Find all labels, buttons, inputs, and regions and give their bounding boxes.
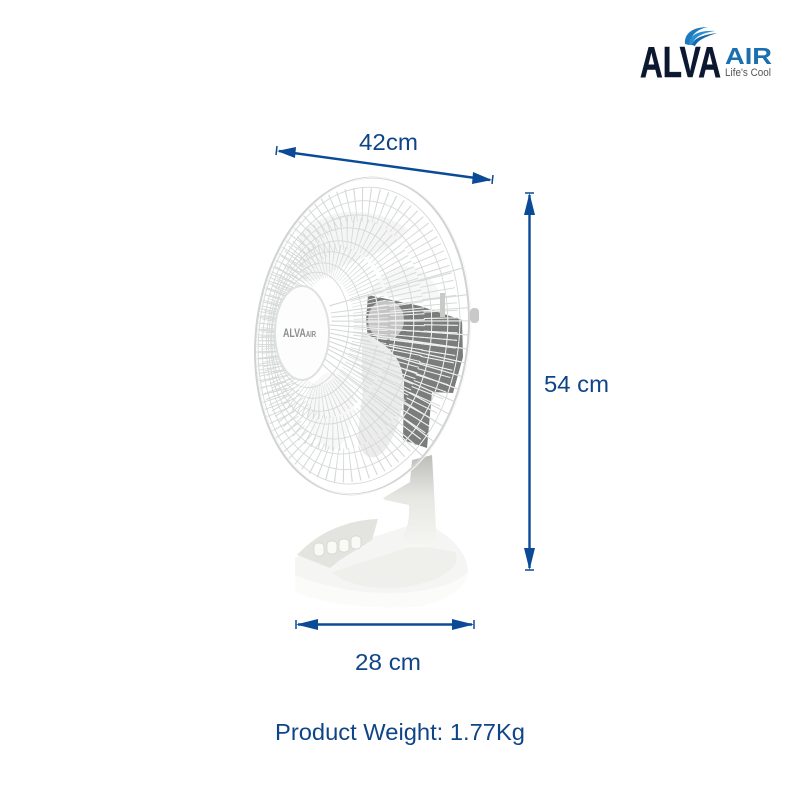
control knobs: [314, 536, 361, 556]
logo wordmark AIR: AIR: [725, 43, 772, 69]
logo wordmark ALVA: ALVA: [640, 38, 721, 87]
fan rim: [237, 165, 487, 507]
fan motor hub highlight: [368, 300, 404, 340]
fan motor housing: [366, 295, 463, 448]
fan neck: [383, 455, 436, 548]
fan badge logo: ALVAAIR: [283, 326, 316, 340]
icon: logo wave: [685, 27, 717, 46]
label: 28 cm: 28 cm: [355, 649, 421, 675]
label: 42cm: 42cm: [359, 129, 418, 155]
dimension: height 54 cm: [524, 193, 609, 570]
fan product image: [254, 176, 479, 593]
logo: Alva Air: [640, 27, 772, 87]
fan grille over motor: [366, 295, 463, 446]
dimension: width 42cm: [276, 129, 493, 184]
logo tagline: Life's Cool: [725, 67, 771, 79]
fan blades: [300, 212, 441, 457]
arrow: base: [296, 619, 474, 630]
fan centre badge: [275, 286, 329, 380]
product weight: Product Weight: 1.77Kg: [275, 719, 525, 745]
fan grille wires: [256, 186, 468, 484]
fan rim clip: [470, 308, 479, 323]
dimension: base 28 cm: [296, 619, 474, 675]
arrow: width: [276, 146, 493, 184]
label: 54 cm: 54 cm: [544, 371, 609, 397]
arrow: height: [524, 193, 535, 570]
fan base: [295, 519, 468, 607]
